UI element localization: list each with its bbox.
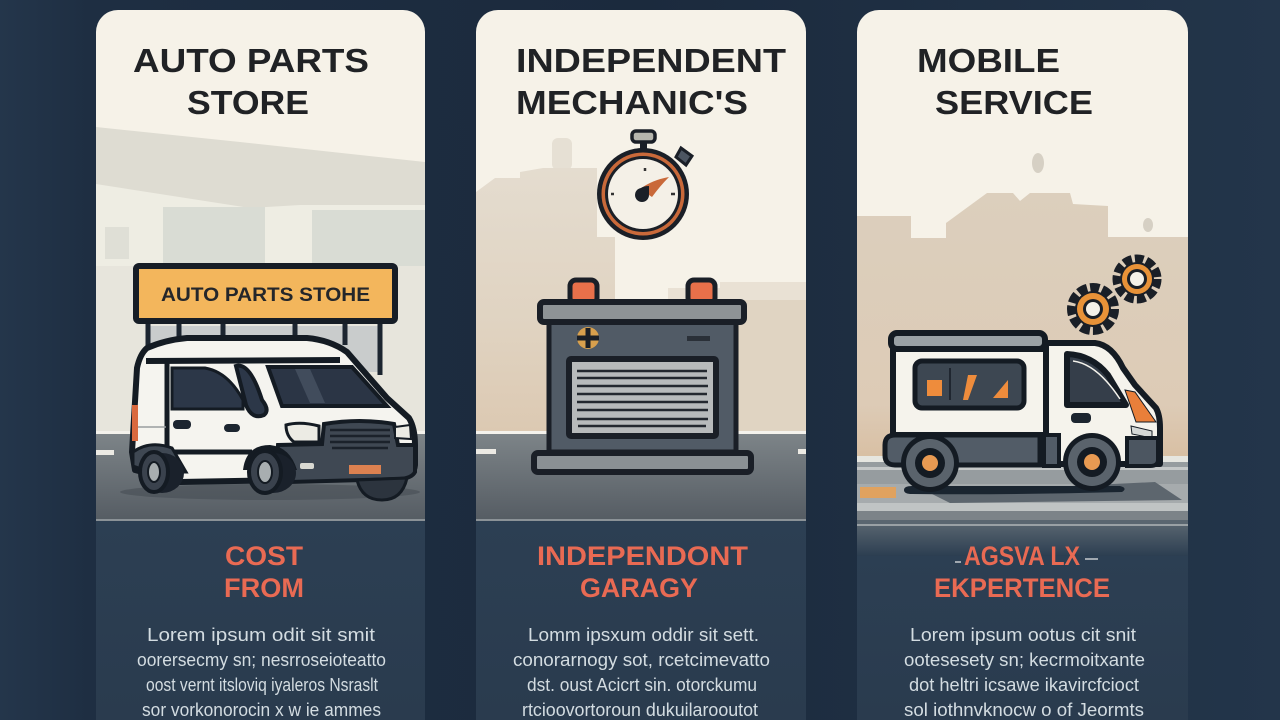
- card 3 body text: Lorem ipsum ootus cit snit: [910, 625, 1136, 645]
- van handles: [173, 420, 191, 429]
- card 1 body text: Lorem ipsum odit sit smit: [147, 625, 375, 645]
- card 2 body text: Lomm ipsxum oddir sit sett.: [528, 625, 759, 645]
- card 1 lower panel: [96, 519, 425, 720]
- battery plus symbol: [577, 327, 599, 349]
- card 1 heading: STORE: [187, 84, 309, 121]
- card 1 body text: oorersecmy sn; nesrroseioteatto: [137, 650, 386, 670]
- icon: service truck: [885, 333, 1160, 492]
- card 3 subheading: EKPERTENCE: [934, 573, 1110, 603]
- van side window: [172, 368, 243, 409]
- card 1 subheading: COST: [225, 541, 304, 571]
- card 1 body text: oost vernt itsloviq iyaleros Nsraslt: [146, 675, 378, 695]
- battery lid: [540, 302, 744, 322]
- battery body: [549, 322, 736, 452]
- panel: auto parts store: [96, 10, 425, 720]
- card 3 heading: [919, 48, 1092, 114]
- card 3 subheading: AGSVA LX: [964, 541, 1080, 571]
- battery vent grille: [569, 359, 716, 436]
- card 3 subheading: [934, 541, 1110, 603]
- card 1 heading: [134, 48, 368, 114]
- card 2 subheading: [538, 546, 748, 598]
- truck headlight: [1125, 390, 1156, 422]
- card 2 heading: [518, 49, 786, 114]
- card 3 body text: sol iothnvknocw o of Jeormts: [904, 700, 1144, 720]
- battery minus symbol: [687, 336, 710, 341]
- card 3 heading: SERVICE: [935, 84, 1093, 121]
- van headlights: [286, 423, 319, 442]
- truck skirt: [885, 435, 1040, 465]
- van bumper and grille: [275, 421, 415, 482]
- truck door handle: [1071, 413, 1091, 423]
- card 1 body text: [137, 625, 386, 720]
- card 1 subheading: FROM: [224, 573, 304, 603]
- icon: car battery: [534, 280, 751, 472]
- card 3 body text: ootesesety sn; kecrmoitxante: [904, 650, 1145, 670]
- battery base: [534, 453, 751, 472]
- card 2 subheading: INDEPENDONT: [537, 541, 749, 571]
- card 2 subheading: GARAGY: [580, 573, 698, 603]
- card 2 backdrop: [476, 10, 806, 521]
- card 1 body text: sor vorkonorocin x w ie ammes: [142, 700, 381, 720]
- card 1 backdrop: [96, 10, 425, 521]
- van windshield: [268, 367, 387, 406]
- card 2 body text: [513, 625, 770, 720]
- battery terminals: [570, 280, 597, 304]
- panel: independent mechanic's: [476, 10, 806, 720]
- van door mirror and pillar: [236, 366, 267, 416]
- card 2 body text: dst. oust Acicrt sin. otorckumu: [527, 675, 757, 695]
- card 1 subheading: [226, 546, 303, 598]
- card 2 heading: INDEPENDENT: [516, 42, 786, 79]
- truck box window: [915, 361, 1024, 408]
- truck cab window: [1067, 354, 1126, 405]
- card 3 heading: MOBILE: [917, 42, 1060, 79]
- card 2 heading: MECHANIC'S: [516, 84, 748, 121]
- icon: gears: [1072, 259, 1157, 330]
- truck box roof: [891, 333, 1045, 349]
- truck box: [893, 349, 1046, 435]
- van wheels: [133, 445, 407, 500]
- icon: stopwatch: [597, 131, 692, 240]
- card 2 body text: rtcioovortoroun dukuilarooutot: [522, 700, 758, 720]
- van body: [132, 338, 415, 482]
- auto parts store sign: AUTO PARTS STOHE: [161, 285, 370, 306]
- icon: white van: [120, 338, 420, 500]
- card 3 backdrop: [857, 10, 1188, 556]
- card 3 body text: [904, 625, 1145, 720]
- auto parts store sign: [136, 266, 395, 375]
- van tail light: [132, 405, 138, 441]
- card 2 lower panel: [476, 519, 806, 720]
- card 3 lower panel: [857, 556, 1188, 720]
- card 1 heading: AUTO PARTS: [133, 42, 369, 79]
- stopwatch needle: [640, 177, 669, 197]
- card 3 body text: dot heltri icsawe ikavircfcioct: [909, 675, 1139, 695]
- panel: mobile service: [857, 10, 1188, 720]
- card 2 body text: conorarnogy sot, rcetcimevatto: [513, 650, 770, 670]
- truck cab: [1040, 343, 1160, 464]
- truck wheels: [901, 433, 1121, 492]
